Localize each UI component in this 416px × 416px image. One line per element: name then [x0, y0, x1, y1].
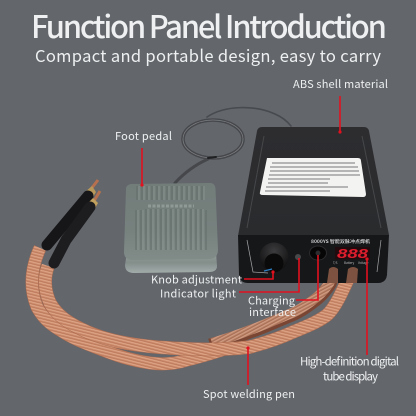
cable from lower pen to right terminal: [45, 266, 353, 349]
cable to left terminal: [210, 267, 333, 345]
callout: Charging interface: [248, 255, 318, 320]
callout: Knob adjustment: [151, 270, 275, 288]
lower welding pen: [54, 191, 100, 263]
subtitle: Compact and portable design, easy to carry: [35, 43, 381, 67]
cable from upper pen: [32, 248, 225, 364]
indicator light: [295, 254, 301, 260]
right terminal: [346, 267, 358, 283]
pedal brand mark: [148, 204, 194, 208]
callout: Charging interface: Charging: [248, 292, 296, 308]
box front face: [238, 235, 389, 283]
callout: Charging interface: interface: [249, 304, 296, 320]
callout: Indicator light: [160, 258, 299, 302]
callout: digital tube display: tube display: [323, 368, 378, 384]
control box: [238, 127, 389, 283]
left terminal: [327, 267, 338, 283]
callout: ABS shell material: [293, 76, 388, 134]
callout: Indicator light: Indicator light: [160, 286, 236, 302]
pedal ribs: [136, 186, 206, 250]
front panel outline: [247, 240, 381, 273]
callout: ABS shell material: ABS shell material: [293, 76, 388, 92]
callout: digital tube display: High-definition digital: [300, 354, 399, 370]
digital display: 888: [337, 246, 369, 261]
terminal labels: T/S: [333, 261, 338, 265]
foot pedal cord: [175, 108, 291, 183]
callout: Spot welding pen: [203, 346, 295, 402]
upper welding pen: [47, 180, 98, 245]
charging port: [310, 246, 326, 260]
foot pedal: [124, 183, 218, 273]
callout: Foot pedal: [115, 128, 172, 187]
knob: [260, 242, 288, 272]
control box: Voltage: [358, 261, 369, 265]
box top face: [238, 127, 389, 236]
title: Function Panel Introduction: [31, 2, 387, 47]
callout: Knob adjustment: Knob adjustment: [151, 272, 242, 288]
digital display: [335, 246, 370, 261]
model name: 8000YS 智能双脉冲点焊机: [311, 238, 370, 245]
callout: Foot pedal: Foot pedal: [115, 128, 172, 144]
callout: Spot welding pen: Spot welding pen: [203, 386, 295, 402]
spot welding cables: [32, 248, 353, 364]
instruction label: [260, 158, 366, 197]
box top grooves: [247, 136, 381, 228]
control box: Battery: [344, 261, 355, 265]
callout: digital tube display: [300, 257, 399, 384]
